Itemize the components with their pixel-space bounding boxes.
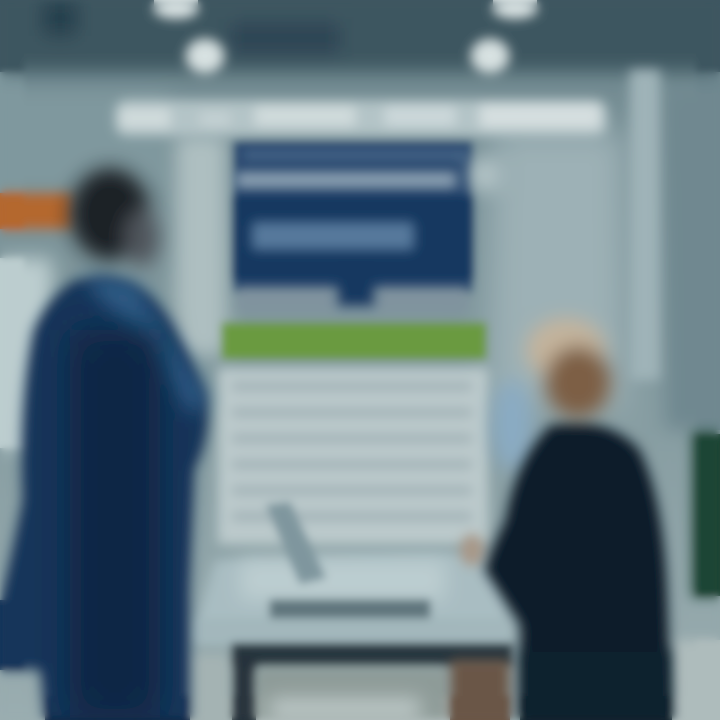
- poster heading band: [115, 100, 607, 136]
- laptop: [266, 502, 430, 618]
- blue highlight behind right person: [492, 380, 532, 470]
- floor right: [675, 640, 720, 720]
- desk top: [192, 552, 515, 644]
- orange wall sign: [0, 193, 72, 229]
- person left: [0, 168, 208, 720]
- person right hand: [460, 534, 484, 566]
- wall column right: [630, 70, 660, 380]
- person left head: [70, 168, 159, 266]
- ceiling: [0, 0, 720, 72]
- person right lower jacket: [522, 650, 670, 720]
- person left shirt collar: [85, 275, 208, 415]
- floor left: [190, 655, 230, 720]
- person left dark shading: [70, 330, 160, 720]
- person left body: [0, 277, 208, 720]
- person right body: [484, 423, 672, 720]
- wall column left of poster: [175, 135, 227, 355]
- plant: [692, 432, 720, 597]
- left screen: [0, 258, 52, 448]
- poster lower text area: [218, 368, 488, 544]
- poster navy header: [234, 142, 500, 312]
- desk base: [232, 644, 512, 720]
- person right head: [526, 318, 611, 418]
- person right: [460, 318, 672, 720]
- wall tone patches: [0, 90, 720, 430]
- poster green band: [222, 323, 486, 359]
- ceiling lights: [154, 0, 537, 73]
